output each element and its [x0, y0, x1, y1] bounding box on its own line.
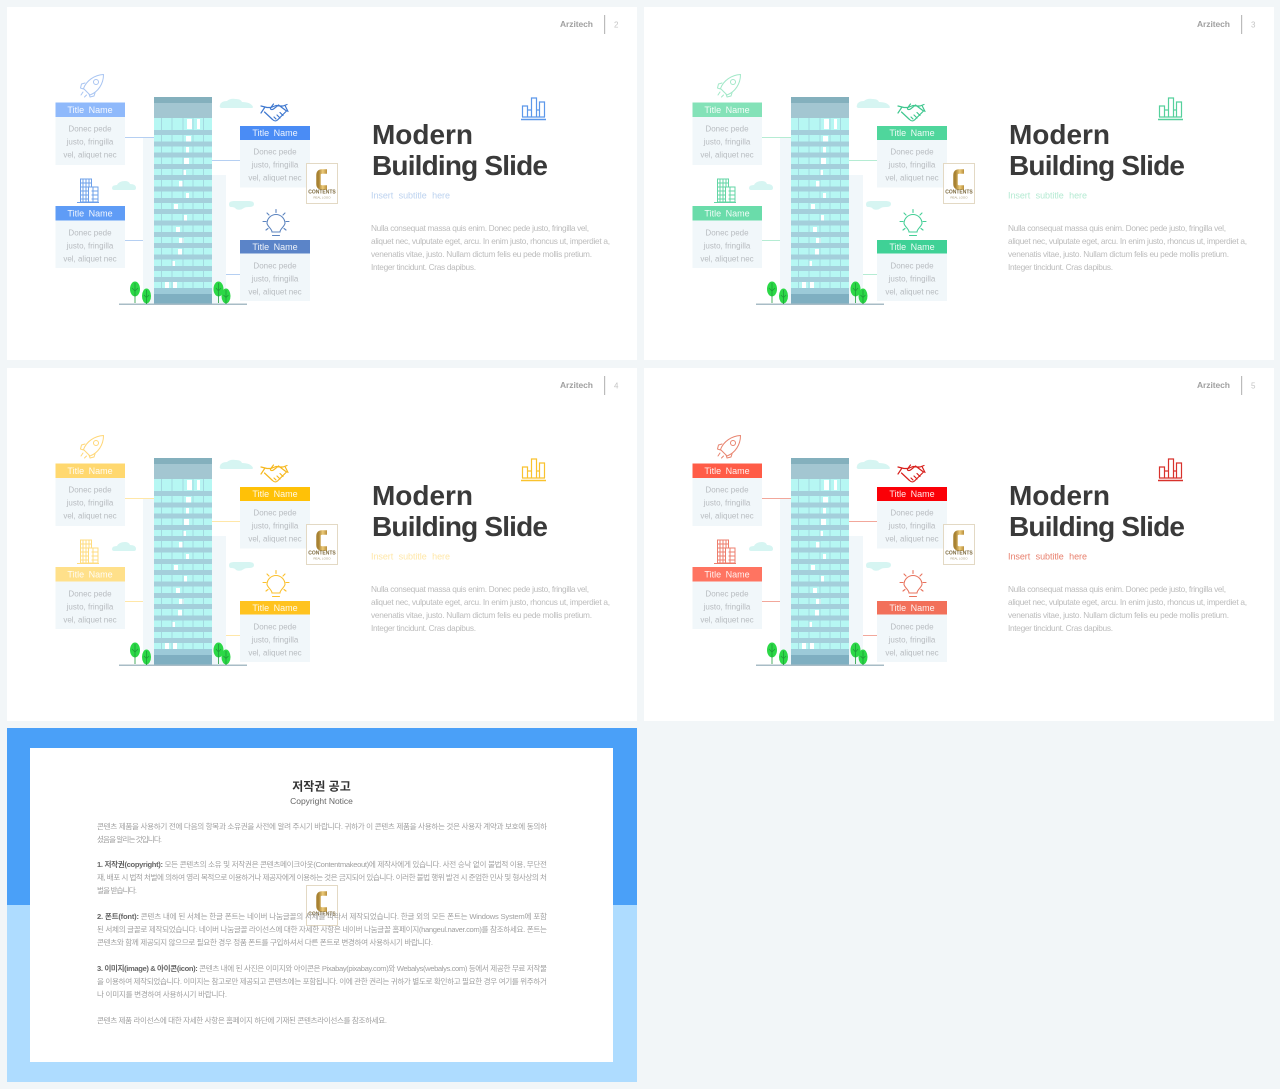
slide panel — [7, 368, 637, 721]
card: bottom right — [240, 601, 310, 662]
icon: bar chart — [1158, 459, 1183, 480]
card: bottom left: Donec pede — [68, 590, 112, 598]
body paragraph — [1008, 584, 1247, 633]
icon: office building — [714, 540, 736, 564]
slide panel — [644, 7, 1274, 360]
card: bottom left: Title Name — [67, 570, 113, 580]
card: top left: justo, fringilla — [66, 138, 114, 146]
slide 4: yellow building slide — [7, 368, 637, 721]
card: top right: justo, fringilla — [888, 160, 936, 170]
icon: light bulb — [263, 210, 289, 236]
header: brand and page number: 2 — [614, 20, 619, 30]
card: bottom left — [56, 206, 125, 268]
section 3: image and icon — [97, 963, 547, 999]
slide 2: blue building slide — [7, 7, 637, 360]
icon: bar chart — [521, 459, 546, 480]
logo stamp — [306, 524, 338, 564]
card: top left: vel, aliquet nec — [700, 512, 754, 520]
card: top right: Title Name — [252, 489, 298, 499]
logo stamp — [306, 164, 338, 204]
header: brand and page number: Arzitech — [560, 380, 593, 390]
card: top right: Title Name — [889, 489, 935, 499]
connector lines — [762, 498, 877, 636]
building illustration — [112, 458, 254, 666]
card: top right: vel, aliquet nec — [248, 174, 302, 182]
header: brand and page number: 5 — [1251, 382, 1256, 390]
card: top right: vel, aliquet nec — [248, 534, 302, 544]
card: bottom right: Title Name — [889, 603, 935, 613]
card: top right: justo, fringilla — [888, 522, 936, 530]
card: top right: vel, aliquet nec — [885, 174, 939, 182]
card: top right: Donec pede — [253, 508, 297, 518]
connector lines — [762, 137, 877, 275]
body paragraph — [371, 584, 610, 633]
card: bottom right: justo, fringilla — [888, 636, 936, 644]
card: bottom right: justo, fringilla — [888, 274, 936, 284]
white notice panel — [30, 748, 613, 1062]
body paragraph: venenatis vitae, justo. Nullam dictum felis eu pede mollis pretium. — [1008, 249, 1229, 259]
card: top right: Title Name — [889, 128, 935, 138]
body paragraph: Nulla consequat massa quis enim. Donec pede justo, fringilla vel, — [1008, 584, 1226, 594]
card: top left: justo, fringilla — [703, 498, 751, 508]
card: top right: justo, fringilla — [251, 160, 299, 170]
card: bottom left: vel, aliquet nec — [700, 616, 754, 624]
logo stamp — [944, 164, 974, 204]
building illustration — [749, 97, 891, 305]
icon: light bulb — [263, 570, 289, 596]
header: brand and page number — [1197, 376, 1256, 395]
card: bottom right: justo, fringilla — [251, 636, 299, 644]
card: bottom left: justo, fringilla — [703, 602, 751, 612]
title — [372, 119, 548, 181]
card: top right: Title Name — [252, 128, 298, 138]
subtitle: Insert subtitle here — [371, 190, 450, 200]
card: top left: vel, aliquet nec — [700, 150, 754, 160]
header: brand and page number — [560, 376, 619, 395]
card: top left: justo, fringilla — [703, 138, 751, 146]
card: bottom left — [692, 567, 762, 629]
closing line: 콘텐츠 제품 라이선스에 대한 자세한 사항은 홈페이지 하단에 기재된 콘텐츠라이선스를 참조하세요. — [97, 1015, 387, 1025]
title — [372, 480, 548, 542]
logo stamp: CONTENTS — [308, 912, 336, 918]
card: bottom left — [56, 567, 125, 629]
blue background upper band — [7, 728, 637, 905]
logo stamp — [944, 524, 974, 564]
logo stamp: CONTENTS — [308, 550, 336, 556]
card: bottom left: Title Name — [704, 570, 750, 580]
section 3: image and icon: 3. 이미지(image) & 아이콘(icon): 콘텐츠 내에 된 사진은 이미지와 아이콘은 Pixabay(pixabay.com)와 Webalys(webalys.com) 등에서 제공한 무료 저작물 — [97, 963, 547, 973]
card: top left: Title Name — [67, 466, 113, 476]
body paragraph: Integer tincidunt. Cras dapibus. — [371, 623, 476, 633]
card: top right: vel, aliquet nec — [885, 534, 939, 544]
card: bottom right: justo, fringilla — [251, 274, 299, 284]
card: bottom left: Title Name — [704, 208, 750, 218]
section 3: image and icon: 을 이용하여 제작되었습니다. 이미지는 참고로만 제공되고 콘텐츠에는 포함됩니다. 이에 관한 권리는 귀하가 별도로 확인하고 필요한 경우 여기를 위주하거 — [97, 976, 547, 986]
logo stamp: CONTENTS — [308, 190, 336, 196]
section 1: copyright: 1. 저작권(copyright): 모든 콘텐츠의 소유 및 저작권은 콘텐츠메이크아웃(Contentmakeout)에 제작사에게 있습니다. 사전 승낙 없이 불법적 이용, 무단전 — [97, 859, 547, 869]
card: bottom left: vel, aliquet nec — [63, 254, 117, 264]
card: bottom left: Donec pede — [68, 228, 112, 238]
card: top right — [240, 126, 310, 188]
title: Building Slide — [1009, 150, 1185, 181]
body paragraph: venenatis vitae, justo. Nullam dictum felis eu pede mollis pretium. — [371, 249, 592, 259]
card: bottom right: Title Name — [889, 242, 935, 252]
card: top right — [877, 487, 947, 548]
body paragraph: aliquet nec, vulputate eget, arcu. In enim justo, rhoncus ut, imperdiet a, — [371, 597, 610, 607]
intro paragraph: 콘텐츠 제품을 사용하기 전에 다음의 항목과 소유권을 사전에 알려 주시기 바랍니다. 귀하가 이 콘텐츠 제품을 사용하는 것은 사용자 계약과 보호에 동의하 — [97, 821, 547, 831]
body paragraph: Integer tincidunt. Cras dapibus. — [1008, 623, 1113, 633]
card: top left — [56, 464, 125, 526]
title: Modern — [372, 119, 473, 150]
light blue background lower band — [7, 905, 637, 1082]
card: bottom right: vel, aliquet nec — [885, 288, 939, 296]
card: top right: Donec pede — [890, 148, 934, 156]
header: brand and page number — [560, 15, 619, 34]
icon: bar chart — [1158, 98, 1183, 120]
building illustration — [749, 458, 891, 666]
card: top left: vel, aliquet nec — [63, 512, 117, 520]
subtitle: Insert subtitle here — [1008, 552, 1087, 562]
icon: rocket — [718, 74, 740, 97]
logo stamp: REAL LOGO — [950, 196, 968, 200]
card: top left: vel, aliquet nec — [63, 150, 117, 160]
title: Building Slide — [372, 150, 548, 181]
icon: rocket — [80, 74, 104, 97]
card: bottom left: justo, fringilla — [66, 602, 114, 612]
logo stamp — [306, 886, 338, 926]
card: top right: Donec pede — [253, 148, 297, 156]
notice title: 저작권 공고 — [292, 778, 351, 794]
title — [1009, 119, 1185, 181]
slide 5: red building slide — [644, 368, 1274, 721]
header: brand and page number: Arzitech — [1197, 19, 1230, 29]
card: top right: justo, fringilla — [251, 522, 299, 530]
body paragraph — [1008, 223, 1247, 272]
card: bottom left: Donec pede — [705, 590, 749, 598]
card: top right: Donec pede — [890, 508, 934, 518]
card: top left: Donec pede — [705, 124, 749, 134]
section 1: copyright — [97, 859, 547, 895]
icon: office building — [77, 540, 99, 564]
icon: rocket — [80, 436, 104, 458]
body paragraph: Integer tincidunt. Cras dapibus. — [371, 262, 476, 272]
card: bottom left: justo, fringilla — [703, 242, 751, 250]
card: bottom right: Donec pede — [253, 622, 297, 632]
card: top left: justo, fringilla — [66, 498, 114, 508]
slide panel — [7, 7, 637, 360]
card: bottom right: Title Name — [252, 603, 298, 613]
intro paragraph: 셨음을 알리는 것입니다. — [97, 834, 162, 844]
icon: light bulb — [900, 210, 926, 236]
card: top left: Title Name — [67, 105, 113, 115]
notice subtitle: Copyright Notice — [290, 796, 353, 806]
intro paragraph — [97, 821, 547, 844]
slide panel — [644, 368, 1274, 721]
title: Modern — [1009, 119, 1110, 150]
header: brand and page number: Arzitech — [1197, 380, 1230, 390]
card: bottom right: vel, aliquet nec — [248, 288, 302, 296]
card: top left — [692, 464, 762, 526]
body paragraph: venenatis vitae, justo. Nullam dictum felis eu pede mollis pretium. — [371, 610, 592, 620]
body paragraph: Nulla consequat massa quis enim. Donec pede justo, fringilla vel, — [371, 584, 589, 594]
card: bottom right: Donec pede — [253, 262, 297, 270]
card: bottom left: justo, fringilla — [66, 242, 114, 250]
body paragraph — [371, 223, 610, 272]
connector lines — [125, 498, 240, 636]
card: bottom left: vel, aliquet nec — [700, 254, 754, 264]
body paragraph: aliquet nec, vulputate eget, arcu. In enim justo, rhoncus ut, imperdiet a, — [371, 236, 610, 246]
section 2: font: 된 서체의 글꼴로 제작되었습니다. 네이버 나눔글꼴 라이선스에 대한 자세한 사항은 네이버 나눔글꼴 홈페이지(hangeul.naver.com)를 참조하세요. 폰트는 — [97, 924, 547, 934]
logo stamp: REAL LOGO — [950, 556, 968, 560]
card: bottom left — [692, 206, 762, 268]
section 1: copyright: 재, 배포 시 법적 처벌에 의하여 영리 목적으로 이용하거나 제공자에게 이용하는 것은 금지되어 있습니다. 이러한 불법 행위 발견 시 준엄한 민사 및 형사상의 처 — [97, 872, 547, 882]
card: bottom right: Donec pede — [890, 622, 934, 632]
slide 6: copyright notice — [7, 728, 637, 1082]
card: bottom left: Title Name — [67, 208, 113, 218]
title: Modern — [372, 480, 473, 511]
card: bottom right — [877, 601, 947, 662]
subtitle: Insert subtitle here — [1008, 190, 1087, 200]
card: top left: Donec pede — [705, 486, 749, 494]
header: brand and page number: Arzitech — [560, 19, 593, 29]
section 2: font: 2. 폰트(font): 콘텐츠 내에 된 서체는 한글 폰트는 네이버 나눔글꼴의 서체를 따라서 제작되었습니다. 한글 외의 모든 폰트는 Windows System에 포함 — [97, 911, 547, 921]
icon: handshake — [898, 465, 925, 482]
connector lines — [125, 137, 240, 275]
icon: handshake — [261, 465, 288, 482]
card: bottom right — [240, 240, 310, 301]
icon: bar chart — [521, 98, 546, 120]
title — [1009, 480, 1185, 542]
icon: handshake — [898, 104, 925, 121]
body paragraph: Nulla consequat massa quis enim. Donec pede justo, fringilla vel, — [371, 223, 589, 233]
icon: office building — [77, 179, 99, 202]
icon: office building — [714, 179, 736, 202]
card: top left — [56, 102, 125, 165]
title: Building Slide — [1009, 511, 1185, 542]
header: brand and page number — [1197, 15, 1256, 34]
card: bottom right: Title Name — [252, 242, 298, 252]
slide 3: green building slide — [644, 7, 1274, 360]
card: bottom right: vel, aliquet nec — [885, 648, 939, 658]
body paragraph: Integer tincidunt. Cras dapibus. — [1008, 262, 1113, 272]
icon: light bulb — [900, 570, 926, 596]
card: bottom left: Donec pede — [705, 228, 749, 238]
subtitle: Insert subtitle here — [371, 552, 450, 562]
card: bottom right — [877, 240, 947, 301]
logo stamp: REAL LOGO — [313, 196, 331, 200]
section 2: font — [97, 911, 547, 947]
section 3: image and icon: 나 이미지를 변경하여 사용하시기 바랍니다. — [97, 989, 227, 999]
section 2: font: 콘텐츠와 함께 제공되지 않으므로 필요한 경우 정품 폰트를 구입하셔서 다른 폰트로 변경하여 사용하시기 바랍니다. — [97, 937, 433, 947]
title: Modern — [1009, 480, 1110, 511]
card: top left: Title Name — [704, 105, 750, 115]
header: brand and page number: 4 — [614, 382, 619, 390]
section 1: copyright: 벌을 받습니다. — [97, 885, 137, 895]
logo stamp: CONTENTS — [945, 550, 973, 556]
body paragraph: venenatis vitae, justo. Nullam dictum felis eu pede mollis pretium. — [1008, 610, 1229, 620]
icon: handshake — [261, 104, 288, 121]
card: bottom left: vel, aliquet nec — [63, 616, 117, 624]
card: top left: Title Name — [704, 466, 750, 476]
title: Building Slide — [372, 511, 548, 542]
logo stamp: CONTENTS — [945, 190, 973, 196]
card: top right — [877, 126, 947, 188]
card: top right — [240, 487, 310, 548]
body paragraph: aliquet nec, vulputate eget, arcu. In enim justo, rhoncus ut, imperdiet a, — [1008, 597, 1247, 607]
card: top left: Donec pede — [68, 124, 112, 134]
body paragraph: aliquet nec, vulputate eget, arcu. In enim justo, rhoncus ut, imperdiet a, — [1008, 236, 1247, 246]
icon: rocket — [718, 436, 740, 458]
card: top left: Donec pede — [68, 486, 112, 494]
building illustration — [112, 97, 254, 305]
card: top left — [692, 102, 762, 165]
logo stamp: REAL LOGO — [313, 556, 331, 560]
card: bottom right: vel, aliquet nec — [248, 648, 302, 658]
body paragraph: Nulla consequat massa quis enim. Donec pede justo, fringilla vel, — [1008, 223, 1226, 233]
card: bottom right: Donec pede — [890, 262, 934, 270]
header: brand and page number: 3 — [1251, 20, 1256, 30]
